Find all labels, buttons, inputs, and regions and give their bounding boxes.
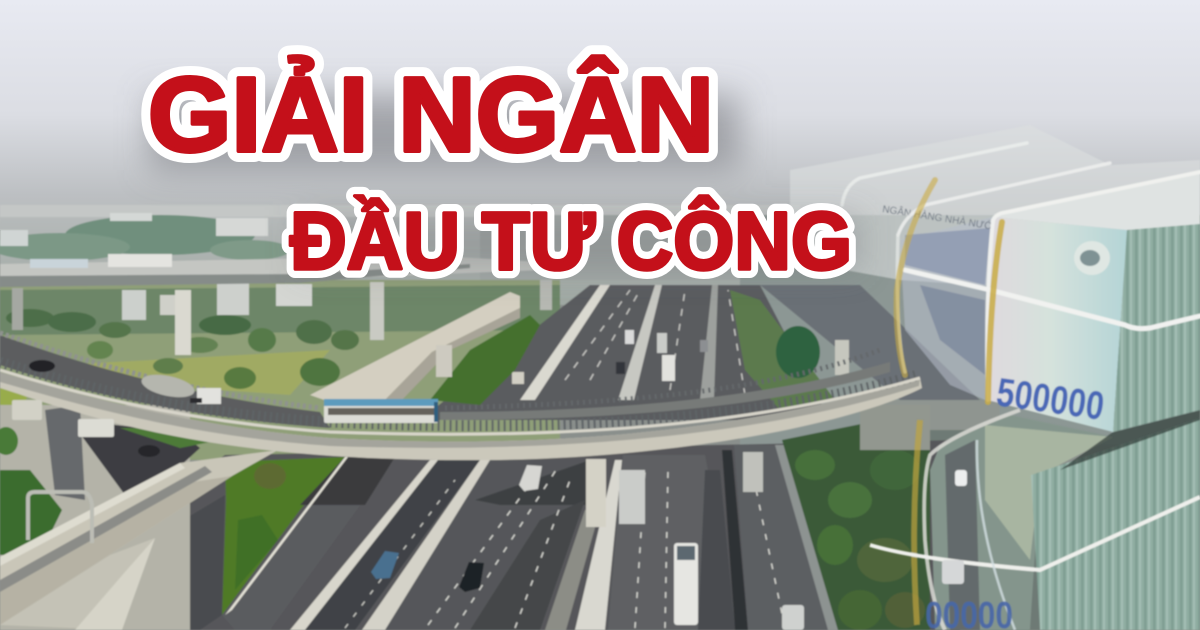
left flyover pillar [45, 405, 85, 500]
roadside greenery right [782, 405, 930, 630]
vehicles on lower road [371, 452, 804, 630]
central pillar [586, 459, 606, 527]
banknote value 500000: 500000 [994, 370, 1107, 429]
money bundles overlay [790, 125, 1200, 630]
back-right deck rail [445, 350, 880, 408]
park ground [0, 280, 560, 460]
green roundabout and left foliage [0, 405, 286, 630]
tanker truck [140, 371, 221, 404]
photo: expressway interchange [0, 205, 1200, 630]
title: GIẢI NGÂN: GIẢI NGÂN [148, 55, 714, 174]
upper bundle faces [987, 172, 1200, 432]
distant city and trees [0, 205, 1200, 305]
lower bundle [870, 410, 1200, 630]
bus on flyover [324, 399, 438, 423]
right backdrop behind banknotes [740, 215, 1200, 630]
main curved flyover [0, 362, 922, 460]
title: GIẢI NGÂN: GIẢI NGÂN [148, 55, 714, 174]
soft shadow behind title [150, 95, 860, 270]
straps of upper bundle [842, 143, 1200, 402]
distant elevated road [0, 254, 552, 355]
cars on flyover [12, 360, 160, 457]
title: ĐẦU TƯ CÔNG: ĐẦU TƯ CÔNG [290, 196, 852, 287]
lower expressway lanes [120, 445, 838, 630]
median trees and rail viaduct behind [310, 290, 849, 410]
lower road surface [120, 440, 960, 630]
back translucent bundles: NGÂN HÀNG NHÀ NƯỚC VIỆT NAM [882, 202, 1050, 241]
back translucent bundles [790, 125, 1200, 400]
back ramp deck [0, 333, 330, 428]
left rail viaduct [0, 450, 278, 630]
background sky haze [0, 0, 1200, 230]
upper expressway [420, 285, 830, 420]
title: ĐẦU TƯ CÔNG: ĐẦU TƯ CÔNG [290, 196, 852, 287]
